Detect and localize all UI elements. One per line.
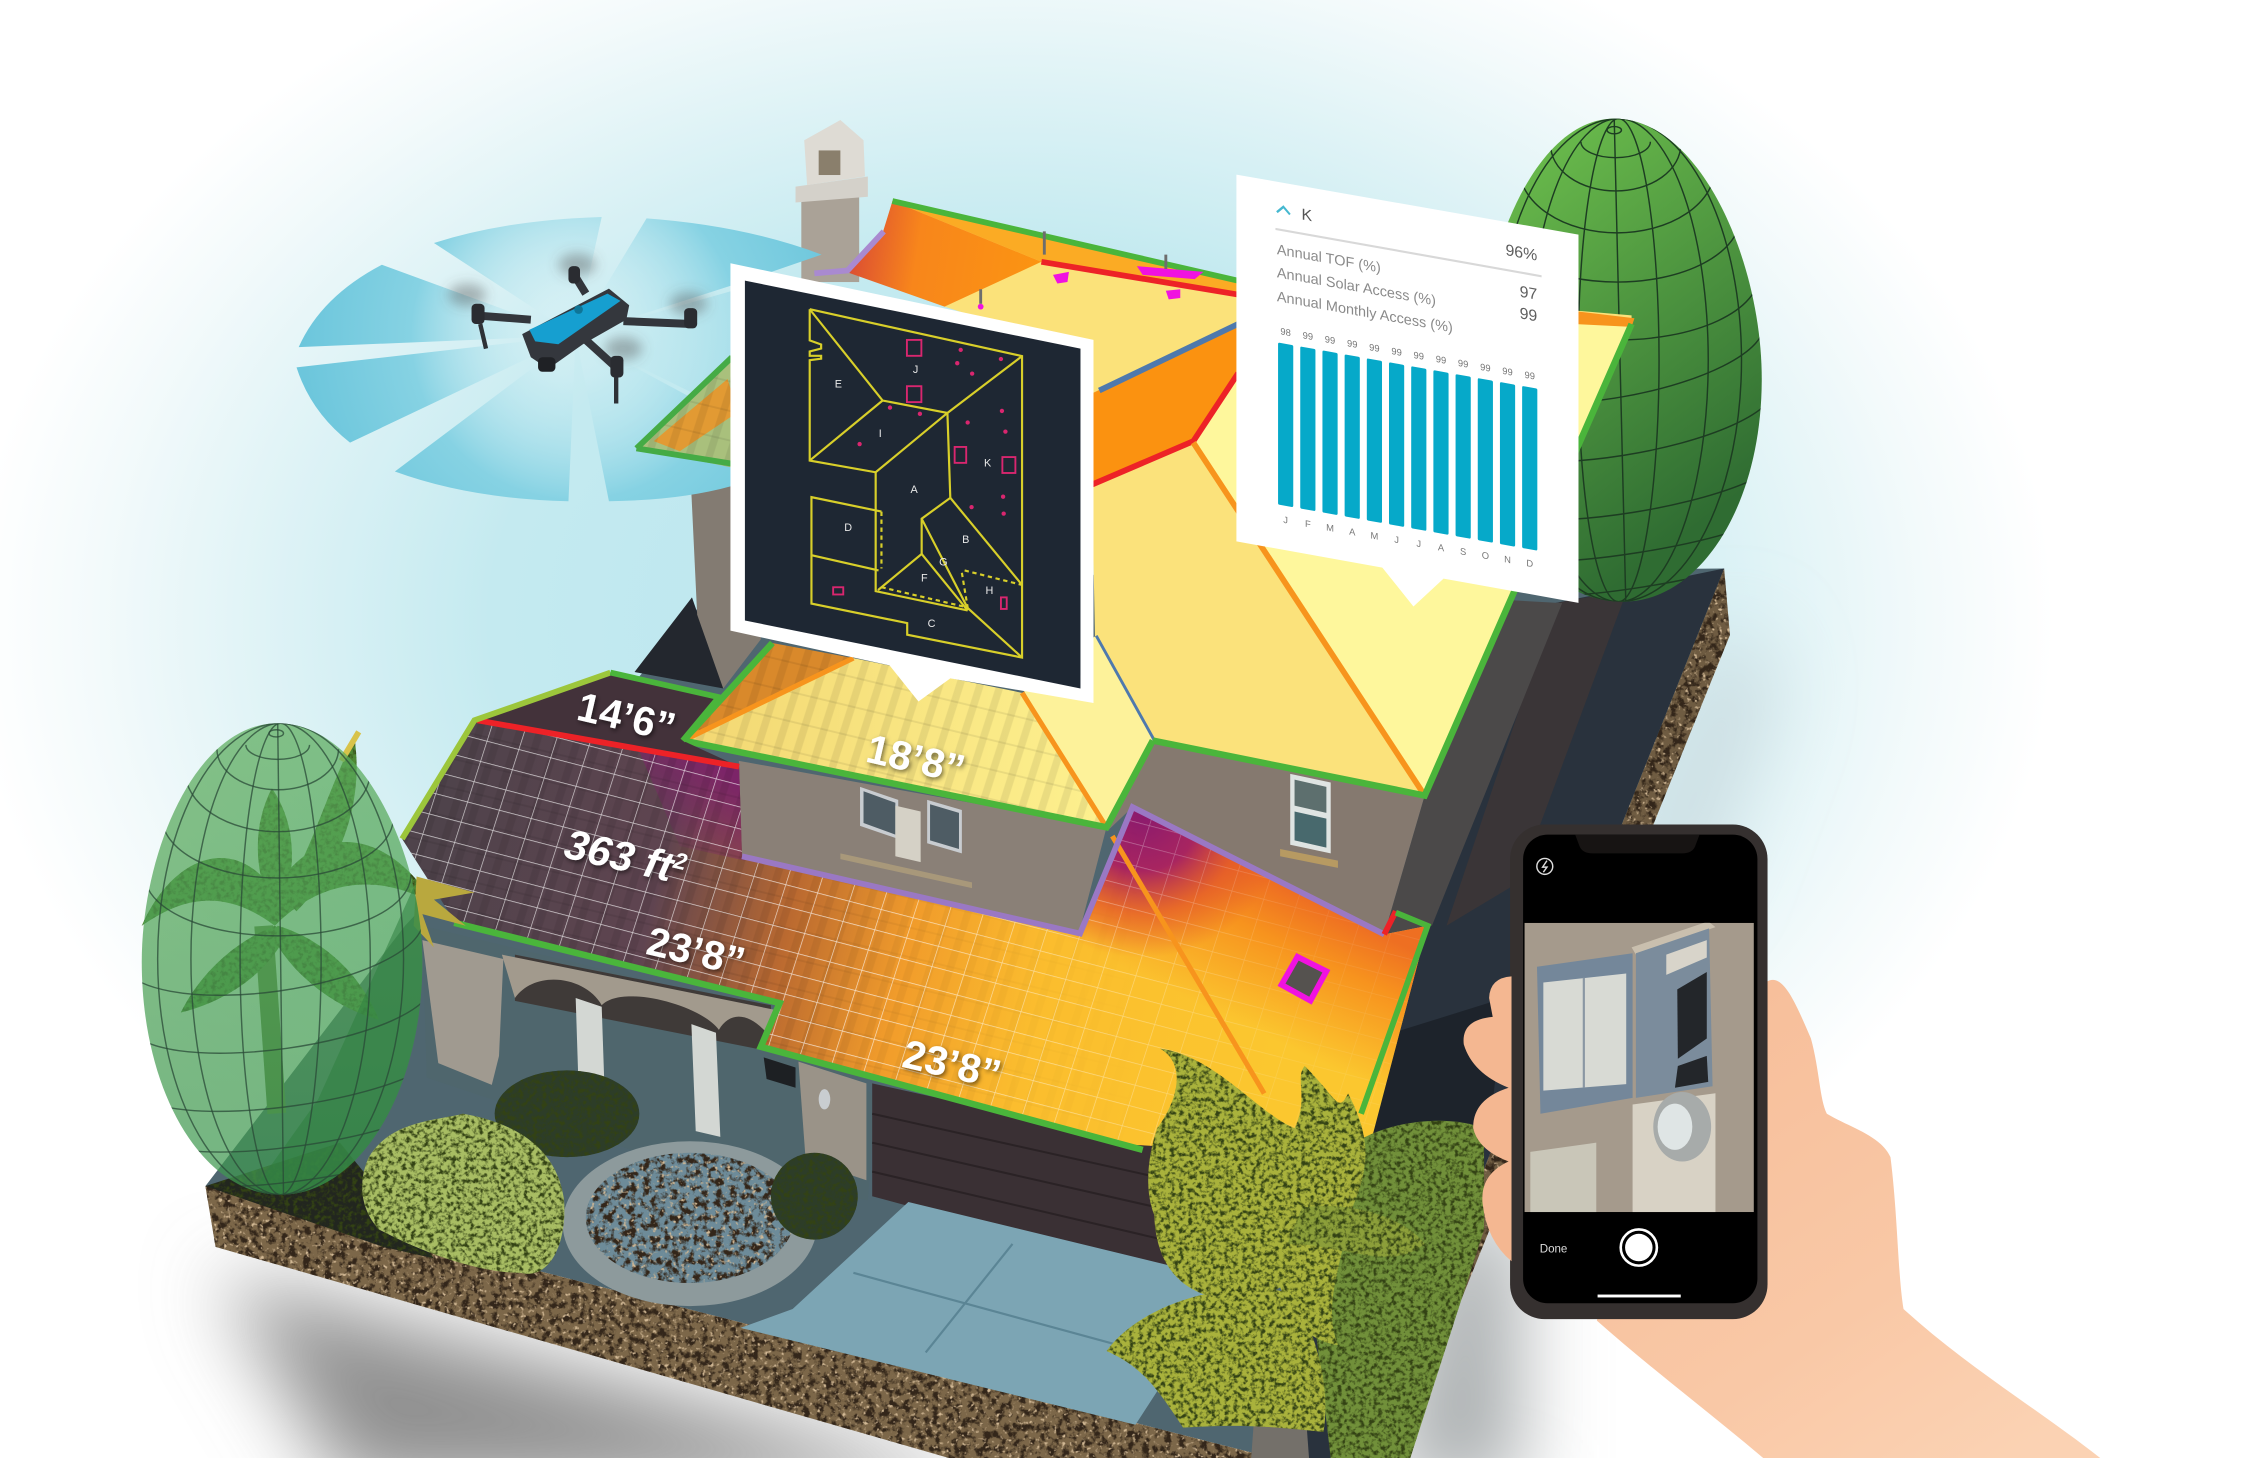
dormer roof (636, 357, 745, 470)
metric labels (1277, 242, 1453, 336)
lower thermal roof with grid (391, 668, 1446, 1172)
metric values: 97 (1520, 283, 1537, 304)
purple ridge edges (742, 807, 1384, 934)
notch (1575, 835, 1700, 853)
tree egg right (1508, 118, 1762, 602)
label: 23'8" lower: 23’8” (899, 1030, 1005, 1098)
chevron (1277, 206, 1290, 214)
label: 18'8": 18’8” (862, 725, 969, 792)
monthly bar chart: O (1482, 550, 1489, 562)
roof vents (978, 266, 1203, 310)
metric labels: Annual Solar Access (%) (1277, 265, 1436, 310)
metric values: 96% (1505, 241, 1537, 265)
yellow facet (1092, 441, 1425, 796)
label: area: 363 ft (560, 820, 678, 890)
motors (472, 266, 697, 378)
soil: right face (1368, 568, 1730, 1458)
facet letters: C (928, 618, 936, 630)
facet letters: K (984, 457, 992, 469)
monthly bar chart: 99 (1458, 358, 1468, 371)
facet letters: B (962, 534, 969, 546)
monthly bar chart: A (1438, 542, 1445, 555)
garage door (872, 1083, 1244, 1287)
monthly bar chart: 99 (1303, 330, 1313, 343)
popup: solar access panel (1236, 175, 1578, 606)
foreground palm trees (1107, 1049, 1484, 1458)
monthly bar chart: F (1305, 519, 1311, 531)
monthly bar chart: N (1504, 554, 1511, 566)
facet letters: E (835, 379, 842, 391)
drone (448, 253, 707, 404)
roof outlines (810, 309, 1022, 658)
window front (840, 787, 972, 888)
monthly bar chart: 99 (1325, 334, 1335, 347)
slab drop shadow (217, 622, 1772, 1458)
entry pier and lamp (798, 1062, 866, 1180)
body (522, 289, 629, 369)
trunk (1251, 1360, 1309, 1458)
window right (1280, 774, 1338, 868)
monthly bar chart: D (1526, 558, 1533, 570)
monthly bar chart: 99 (1436, 354, 1446, 367)
wall below dormer (690, 463, 761, 688)
front gable roof (683, 636, 1153, 827)
hand palm behind phone (1597, 980, 2100, 1458)
home bar (1598, 1295, 1681, 1297)
facet letters: H (985, 585, 993, 597)
column right (691, 1024, 720, 1137)
label: area: 2 (670, 847, 690, 875)
facet letters (835, 364, 993, 630)
fronds (1107, 1049, 1425, 1432)
monthly bar chart: 99 (1391, 346, 1402, 359)
monthly bar chart: M (1326, 522, 1334, 535)
measurement labels (560, 683, 1005, 1098)
monthly bar chart: A (1349, 527, 1356, 539)
divider (1275, 228, 1542, 277)
thermal gradient roof (402, 720, 1428, 1157)
metric values (1505, 241, 1537, 325)
monthly bar chart: 99 (1502, 366, 1513, 379)
facet letters: I (879, 428, 882, 440)
monthly bar chart: S (1460, 546, 1466, 558)
pale facet (1193, 321, 1632, 796)
palm inside (142, 732, 474, 1114)
dark shrubs (205, 1070, 858, 1258)
monthly bar chart: J (1283, 515, 1288, 527)
monthly bar chart: J (1416, 539, 1421, 550)
propeller blur (448, 253, 707, 360)
chimney (796, 120, 868, 282)
label: 14'6": 14’6” (573, 683, 680, 750)
label: 23'8" upper: 23’8” (643, 918, 749, 985)
dark upper porch section (477, 673, 739, 767)
hedge (1309, 1121, 1484, 1458)
phone (1510, 824, 1768, 1319)
monthly bar chart: M (1370, 530, 1378, 543)
monthly bar chart: 99 (1369, 342, 1380, 355)
monthly bar chart: 99 (1347, 338, 1357, 351)
main yellow roof (1092, 311, 1634, 796)
monthly bar chart: 98 (1280, 326, 1291, 339)
column left (576, 998, 605, 1092)
soil: front face (205, 1186, 1273, 1458)
plan canvas (745, 281, 1080, 688)
facet letters: F (921, 572, 928, 584)
roof obstructions (833, 340, 1015, 609)
facet letters: D (844, 522, 852, 534)
arms (474, 275, 691, 369)
porch stucco and columns (422, 926, 875, 1201)
metric labels: Annual Monthly Access (%) (1277, 289, 1453, 336)
monthly bar chart: 99 (1414, 350, 1424, 363)
top back roof (814, 201, 1632, 393)
red measure lines (477, 720, 1396, 934)
walls of upper house (739, 600, 1562, 934)
flash icon (1537, 858, 1553, 874)
monthly bar chart: J (1394, 535, 1399, 546)
facet letters: G (939, 557, 948, 569)
facet letters: J (913, 364, 918, 376)
panel letter: K (1301, 206, 1312, 225)
metric values: 99 (1520, 304, 1537, 325)
edge lines (402, 673, 610, 839)
shutter button (1621, 1229, 1657, 1266)
ridge line (1112, 836, 1264, 1094)
metric labels: Annual TOF (%) (1277, 242, 1381, 277)
rear walkway dark strip (1273, 568, 1724, 1458)
facet letters: A (911, 484, 919, 496)
popup: roof plan (730, 263, 1094, 703)
monthly bar chart: 99 (1480, 362, 1491, 375)
driveway (741, 1202, 1229, 1425)
fingers (1464, 976, 1512, 1261)
blue top (529, 294, 621, 344)
camera view (1525, 921, 1755, 1212)
monthly bar chart: 99 (1524, 370, 1535, 383)
tree egg left with palm (122, 723, 474, 1201)
roof vent (1282, 957, 1326, 1001)
drone rotor wash (297, 217, 822, 501)
done label: Done (1540, 1244, 1567, 1256)
ground slab with soil edges (205, 568, 1730, 1458)
monthly bar chart (1278, 326, 1537, 571)
orange band (1092, 321, 1241, 485)
stone patio (563, 1141, 817, 1306)
light green bush (362, 1114, 564, 1274)
